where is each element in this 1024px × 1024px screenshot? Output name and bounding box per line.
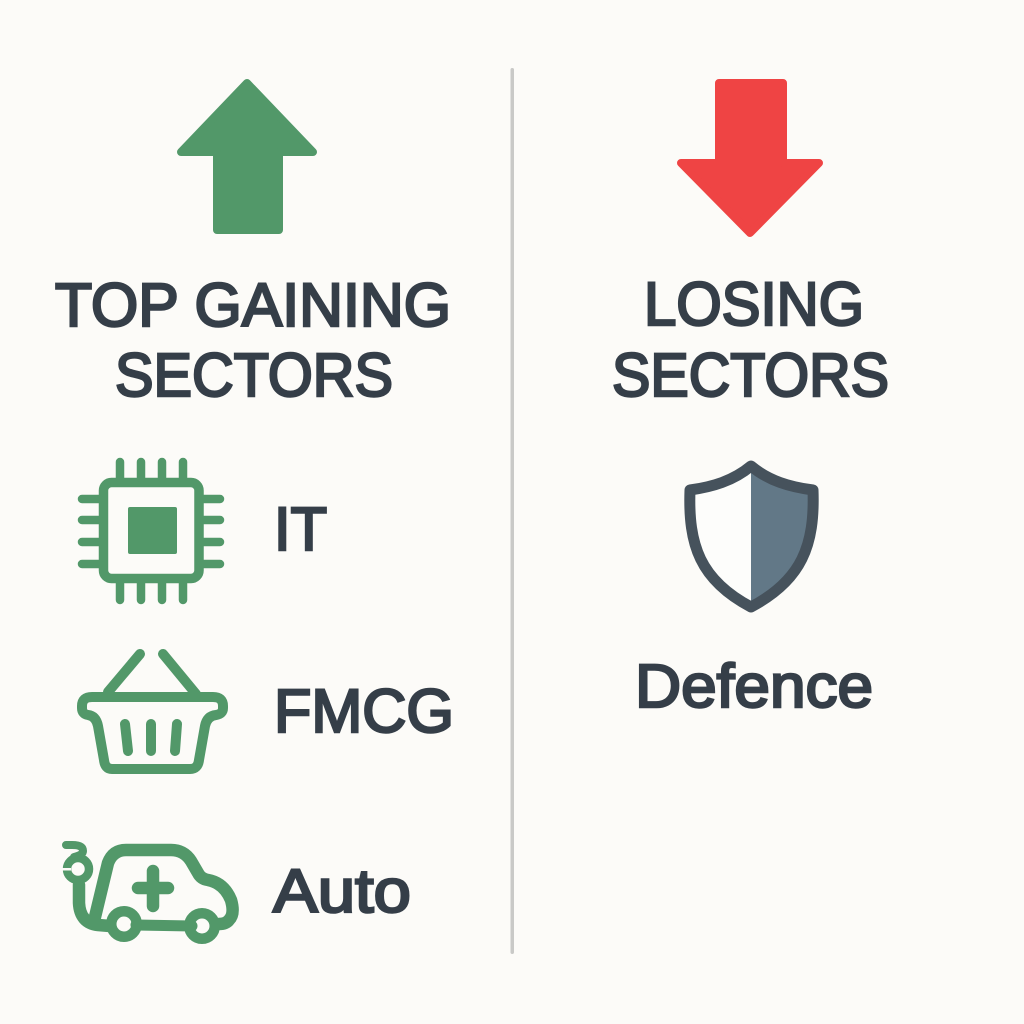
icon: microchip: [82, 462, 220, 600]
heading: losing sectors: LOSING: [644, 270, 864, 338]
icon: green up arrow: [181, 83, 313, 230]
heading: top gaining sectors: SECTORS: [115, 341, 393, 409]
panel: losing sectors: [612, 83, 889, 720]
icon: shopping basket: [82, 654, 223, 769]
heading: top gaining sectors: TOP GAINING: [55, 271, 451, 339]
label: Auto: Auto: [273, 857, 411, 925]
heading: losing sectors: [612, 270, 889, 409]
label: FMCG: FMCG: [274, 677, 454, 745]
panel: gaining sectors: [55, 83, 454, 939]
icon: red down arrow: [681, 83, 819, 233]
heading: top gaining sectors: [55, 271, 451, 409]
panel divider: [510, 68, 514, 954]
icon: half-filled shield: [690, 466, 813, 607]
heading: losing sectors: SECTORS: [612, 341, 889, 409]
icon: electric car: [61, 845, 233, 939]
label: Defence: Defence: [635, 652, 873, 720]
label: IT: IT: [274, 495, 327, 563]
